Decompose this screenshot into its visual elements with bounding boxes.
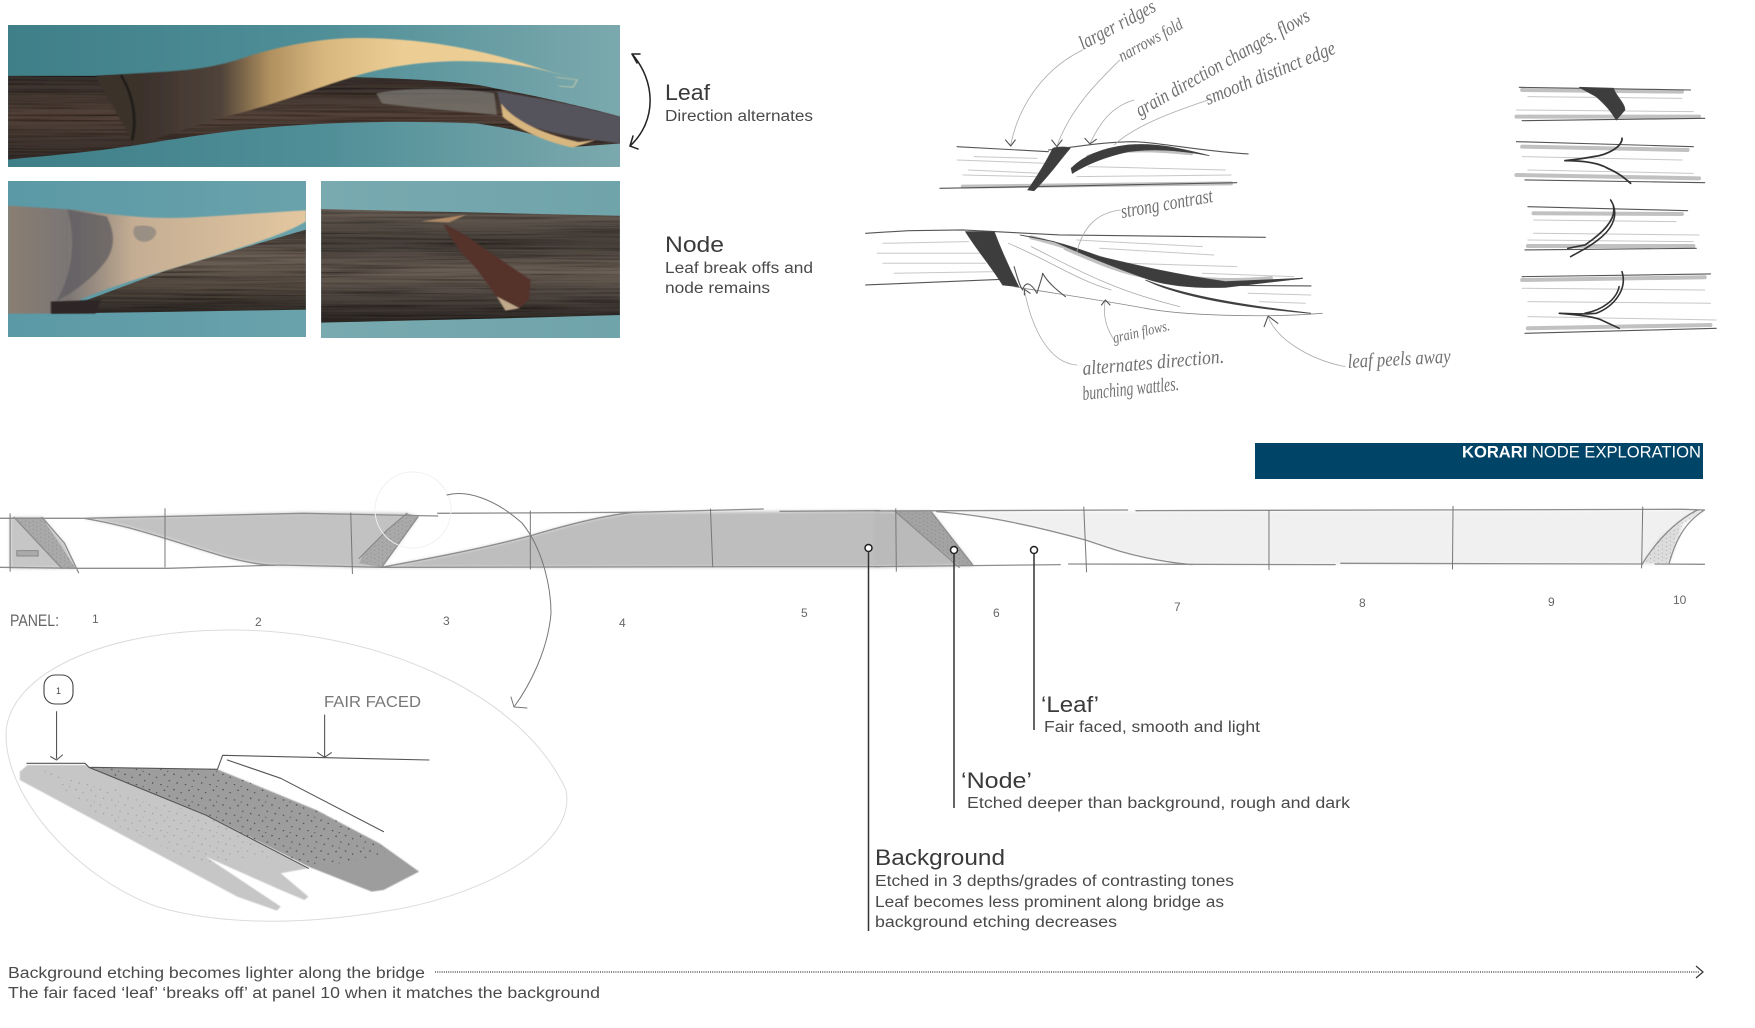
arrow: dotted direction along the bridge — [435, 966, 1703, 978]
callout: node: ‘Node’ — [961, 768, 1032, 793]
handwritten panel numbers: 8 — [1359, 596, 1366, 610]
photo: leaf at the node — [8, 181, 306, 337]
photo: node scar after leaf break off — [321, 181, 620, 338]
handwritten note: leaf peels away: leaf peels away — [1347, 346, 1451, 373]
callout: node: Etched deeper than background, rough and dark — [967, 795, 1350, 812]
callout: background: background etching decreases — [875, 914, 1117, 931]
text: leaf caption: Direction alternates — [665, 108, 813, 125]
callout: leaf — [1030, 546, 1261, 736]
text: node caption: node remains — [665, 280, 770, 297]
callout leader arc and magnifying circle — [375, 472, 551, 708]
callout: leaf: ‘Leaf’ — [1041, 692, 1099, 717]
handwritten panel numbers: 3 — [443, 614, 450, 628]
text: leaf caption: Leaf — [665, 80, 711, 105]
handwritten panel numbers: 4 — [619, 616, 626, 630]
footer text: etching gradient note — [8, 965, 600, 1002]
handwritten note: strong contrast: strong contrast — [1119, 185, 1215, 223]
callout: background: Leaf becomes less prominent along bridge as — [875, 894, 1224, 911]
footer text: etching gradient note: Background etching becomes lighter along the bridge — [8, 965, 425, 982]
handwritten panel numbers: 9 — [1548, 595, 1555, 609]
handwritten note: grain flows: grain flows. — [1111, 318, 1171, 347]
handwritten note: smooth distinct edge: smooth distinct edge — [1202, 37, 1339, 110]
text: node caption: Node — [665, 232, 724, 257]
banner: korari node exploration — [1255, 443, 1703, 479]
handwritten note: bunching wattles: bunching wattles. — [1081, 373, 1180, 405]
banner: korari node exploration: KORARI NODE EXPLORATION — [1462, 444, 1701, 462]
text: leaf caption — [665, 80, 813, 125]
text: node caption: Leaf break offs and — [665, 260, 813, 277]
handwritten panel numbers: 10 — [1673, 593, 1687, 607]
handwritten note: narrows fold: narrows fold — [1115, 14, 1186, 65]
callout: leaf: Fair faced, smooth and light — [1044, 719, 1261, 736]
detail label: fair faced: FAIR FACED — [324, 694, 421, 711]
handwritten panel numbers: 1 — [92, 612, 99, 626]
handwritten note: alternates direction: alternates direction. — [1082, 346, 1225, 380]
callout: background: Etched in 3 depths/grades of contrasting tones — [875, 873, 1234, 890]
callout: background — [865, 544, 1234, 931]
handwritten panel numbers: 2 — [255, 615, 262, 629]
callout: background: Background — [875, 845, 1005, 870]
detail sketch: node section — [6, 630, 567, 921]
bridge elevation strip: panels 1 to 10 — [0, 506, 1704, 574]
handwritten panel numbers — [10, 593, 1687, 630]
arrow: leaf direction alternates — [630, 54, 650, 149]
handwritten panel numbers: 6 — [993, 606, 1000, 620]
handwritten panel numbers: 7 — [1174, 600, 1181, 614]
detail marker 1: 1 — [56, 686, 61, 696]
handwritten panel numbers: 5 — [801, 606, 808, 620]
detail marker 1 — [44, 675, 73, 704]
footer text: etching gradient note: The fair faced ‘leaf’ ‘breaks off’ at panel 10 when it matches the background — [8, 985, 600, 1002]
sketch: annotated node studies — [866, 0, 1716, 405]
photo: korari leaf wrapping stem — [8, 25, 620, 167]
callout: node — [950, 546, 1350, 812]
handwritten panel numbers: PANEL: — [10, 611, 59, 630]
text: node caption — [665, 232, 813, 297]
